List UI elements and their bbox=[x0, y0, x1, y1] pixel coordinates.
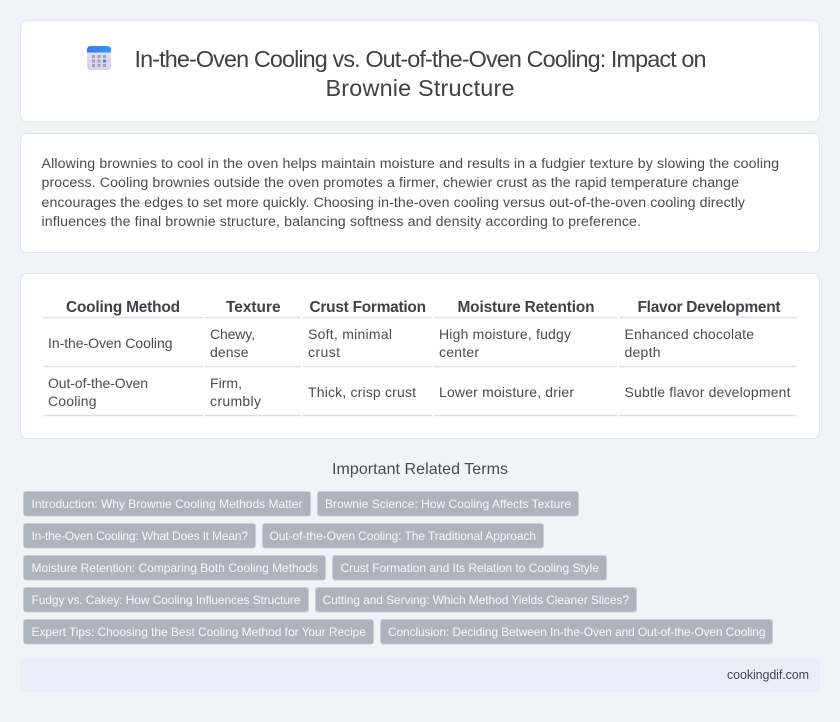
tag row 4: Fudgy vs. Cakey: How Cooling Influences Structure bbox=[32, 593, 301, 607]
table header row: Moisture Retention bbox=[458, 299, 594, 316]
text block: introduction: Allowing brownies to cool in the oven helps maintain moisture and results in a fudgier texture by slowing the cooling bbox=[42, 156, 779, 172]
table row: in-the-oven cooling: depth bbox=[624, 344, 660, 360]
title: Brownie Structure bbox=[326, 75, 514, 101]
tag row 1: Introduction: Why Brownie Cooling Methods Matter bbox=[32, 497, 302, 511]
tag row 4: Cutting and Serving: Which Method Yields Cleaner Slices? bbox=[322, 593, 629, 607]
tag row 3: Moisture Retention: Comparing Both Cooling Methods bbox=[32, 561, 318, 575]
panel: comparison table bbox=[20, 274, 820, 438]
table row: out-of-the-oven cooling: crumbly bbox=[210, 393, 261, 409]
table row: out-of-the-oven cooling bbox=[48, 375, 791, 409]
text block: introduction: process. Cooling brownies outside the oven promotes a firmer, chewier crust as the rapid temperature change bbox=[42, 175, 739, 191]
table row: in-the-oven cooling: In-the-Oven Cooling bbox=[48, 335, 172, 351]
table row: in-the-oven cooling: Chewy, bbox=[210, 326, 255, 342]
table row: in-the-oven cooling: dense bbox=[210, 344, 249, 360]
text block: introduction: encourages the edges to set more quickly. Choosing in-the-oven cooling versus out-of-the-oven cooling directly bbox=[42, 195, 746, 211]
title: In-the-Oven Cooling vs. Out-of-the-Oven Cooling: Impact on bbox=[134, 46, 706, 72]
table row: in-the-oven cooling: center bbox=[439, 344, 479, 360]
table row: in-the-oven cooling: Enhanced chocolate bbox=[624, 326, 754, 342]
table header row: Texture bbox=[226, 299, 281, 316]
table row: out-of-the-oven cooling: Firm, bbox=[210, 375, 242, 391]
tag row 1: Brownie Science: How Cooling Affects Texture bbox=[325, 497, 571, 511]
tag row 5: Expert Tips: Choosing the Best Cooling Method for Your Recipe bbox=[32, 625, 366, 639]
tag row 4 bbox=[24, 588, 636, 612]
table header row: Crust Formation bbox=[310, 299, 426, 316]
table header row: Cooling Method bbox=[66, 299, 180, 316]
table row: out-of-the-oven cooling: Out-of-the-Oven bbox=[48, 375, 148, 391]
table row: in-the-oven cooling: High moisture, fudgy bbox=[439, 326, 571, 342]
footer: cookingdif.com bbox=[727, 668, 809, 682]
table row: out-of-the-oven cooling: Cooling bbox=[48, 393, 96, 409]
table header row: Flavor Development bbox=[638, 299, 780, 316]
panel: introduction paragraph bbox=[20, 134, 820, 252]
table row: in-the-oven cooling: Soft, minimal bbox=[308, 326, 392, 342]
tag row 3: Crust Formation and Its Relation to Cooling Style bbox=[340, 561, 599, 575]
table row: out-of-the-oven cooling: Thick, crisp crust bbox=[308, 384, 416, 400]
tag row 5 bbox=[24, 620, 772, 644]
tag row 3 bbox=[24, 556, 606, 580]
table row: in-the-oven cooling: crust bbox=[308, 344, 340, 360]
title bbox=[134, 46, 706, 101]
tag row 5: Conclusion: Deciding Between In-the-Oven and Out-of-the-Oven Cooling bbox=[388, 625, 766, 639]
text block: introduction: influences the final brownie structure, balancing softness and density according to preference. bbox=[42, 214, 641, 230]
tag row 2: In-the-Oven Cooling: What Does It Mean? bbox=[32, 529, 248, 543]
heading: important related terms: Important Related Terms bbox=[332, 461, 508, 478]
tag row 2 bbox=[24, 524, 544, 548]
tag row 2: Out-of-the-Oven Cooling: The Traditional Approach bbox=[270, 529, 536, 543]
footer bbox=[20, 658, 820, 692]
table header row bbox=[66, 299, 780, 316]
table row: out-of-the-oven cooling: Lower moisture, drier bbox=[439, 384, 574, 400]
panel: header bbox=[20, 20, 820, 122]
tag row 1 bbox=[24, 492, 578, 516]
icon: calendar bbox=[87, 46, 111, 70]
table row: out-of-the-oven cooling: Subtle flavor development bbox=[624, 384, 791, 400]
text block: introduction bbox=[42, 156, 779, 230]
section: important related terms bbox=[24, 461, 772, 644]
table row: in-the-oven cooling bbox=[48, 326, 754, 360]
